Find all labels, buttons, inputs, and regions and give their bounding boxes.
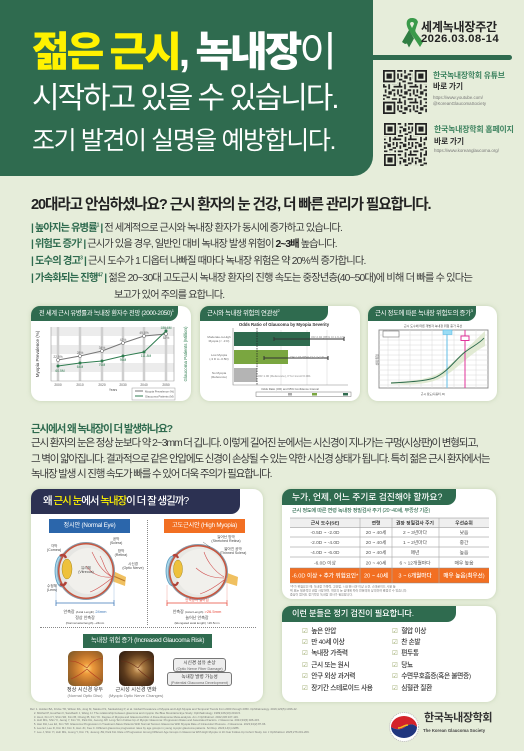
dotted horizontal divider xyxy=(40,627,256,628)
chart 1 heading xyxy=(31,306,178,321)
chart 2 heading xyxy=(200,306,328,321)
line chart: 2020 xyxy=(98,383,106,387)
panel: why myopic eyes xyxy=(31,489,263,702)
high myopia label xyxy=(164,519,245,533)
item: ☑ 편두통 xyxy=(392,650,419,657)
line chart: 22.9% xyxy=(53,355,63,359)
bar chart: OR 2.92 (95% CI 1.9-4.5) xyxy=(311,335,345,339)
icon: high myopia eye diagram: 늘어난 안축장 xyxy=(185,614,209,620)
week date: 2026.03.08-14 xyxy=(421,33,499,45)
panel: myopia severity chart xyxy=(368,306,497,401)
icon: normal eye diagram xyxy=(47,536,144,625)
line chart: Glaucoma Patients (Million) xyxy=(183,326,188,382)
screening table: 매우 높음(최우선) xyxy=(443,572,485,580)
callout: nerve damage xyxy=(173,658,226,672)
bullet: risk: | 위험도 증가2 | 근시가 있을 경우, 일반인 대비 녹내장 발생 위험이 2~3배 높습니다. xyxy=(31,238,337,250)
item: ☑ 당뇨 xyxy=(392,662,413,669)
panel heading: 왜 근시 눈에서 녹내장이 더 잘 생길까? xyxy=(43,495,188,507)
icon: high myopia eye diagram: 얇아진 공막 xyxy=(224,546,242,551)
bar chart: Myopia (< -3 D) xyxy=(209,339,229,343)
icon: high myopia eye diagram: 안축장이 길어짐 xyxy=(185,597,209,602)
line chart: 34% xyxy=(99,346,105,350)
bullet: dose: | 도수의 경고3 | 근시 도수가 1 디옵터 나빠질 때마다 녹내장 위험은 약 20%씩 증가합니다. xyxy=(31,255,366,266)
item: ☑ 만 40세 이상 xyxy=(302,639,344,646)
screening table: 낮음 xyxy=(460,529,469,536)
icon: normal eye diagram: (Lens) xyxy=(47,588,57,592)
high myopia label: 고도근시안 (High Myopia) xyxy=(172,522,237,529)
screening table: 권장 정밀검사 주기 xyxy=(396,520,434,526)
main heading: 20대라고 안심하셨나요? 근시 환자의 눈 건강, 더 빠른 관리가 필요합니다. xyxy=(31,197,430,213)
youtube url: @KoreanGlaucomaSociety xyxy=(433,101,486,106)
increased risk label: 녹내장 위험 증가 (Increased Glaucoma Risk) xyxy=(91,637,204,644)
explanation paragraph xyxy=(31,437,490,480)
society name english: The Korean Glaucoma Society xyxy=(423,728,485,733)
title line 2: 시작하고 있을 수 있습니다. xyxy=(32,82,337,115)
explanation heading: 근시에서 왜 녹내장이 더 발생하나요? xyxy=(31,423,172,435)
screening table: 증상이 없어도 정기적인 녹내장 검사가 필요합니다. xyxy=(290,592,353,596)
callout: nerve damage: (Optic Nerve Fiber Damage) xyxy=(176,666,223,670)
screening table xyxy=(290,518,489,596)
line chart: Years xyxy=(109,388,118,392)
references: 7. Lee J, Shin YI, Huh MG, Jeong Y, Kim YK, Jeoung JW, Park KH. Rate of Progression Among Different Age Groups in Glaucoma With High Myopia: A 10-Year Follow-Up Cohort Study. Am J Ophthalmol. 2025;276:201-209. xyxy=(34,730,309,734)
line 1: 근시 환자의 눈은 정상 눈보다 약 2~3mm 더 깁니다. 이렇게 길어진 눈에서는 시신경이 지나가는 구멍(시상판)이 변형되고, xyxy=(31,437,478,449)
caption normal: (Normal Optic Disc) xyxy=(68,693,102,698)
caption myopic xyxy=(108,686,164,698)
screening table: 20 ~ 40세 xyxy=(366,549,386,556)
fundus photo: myopic xyxy=(119,651,154,686)
checklist left xyxy=(302,627,373,692)
icon: normal eye diagram: (Retina) xyxy=(115,553,127,557)
screening table: -2.0D ~ -4.0D xyxy=(311,540,340,546)
line chart xyxy=(35,326,188,400)
youtube heading: 한국녹내장학회 유튜브 xyxy=(433,71,505,80)
icon: high myopia eye diagram: (Thinned Sclera) xyxy=(220,551,246,555)
caption myopic: (Myopic Optic Nerve Changes) xyxy=(109,693,163,698)
risk curve chart: 근시 정도(디옵터, D) xyxy=(421,392,445,396)
title line 1: 젊은 근시, 녹내장이 xyxy=(32,29,334,75)
line chart: 28% xyxy=(77,351,83,355)
item: ☑ 장기간 스테로이드 사용 xyxy=(302,685,373,692)
icon: high myopia eye diagram xyxy=(166,534,246,625)
line chart: 60.5M xyxy=(55,369,65,373)
icon: normal eye diagram: (Cornea) xyxy=(47,548,61,552)
panel heading: 누가, 언제, 어느 주기로 검진해야 할까요? xyxy=(292,492,442,502)
icon: high myopia eye diagram: (Stretched Retina) xyxy=(211,539,241,543)
bar chart: Odds Ratio of Glaucoma by Myopia Severity xyxy=(239,322,330,327)
bar chart: Low Myopia xyxy=(211,353,227,357)
chart 1 heading: 전 세계 근시 유병률과 녹내장 환자수 전망 (2000-2050)1 xyxy=(39,308,174,317)
icon: normal eye diagram: 안축장 (Axial Length) 24mm xyxy=(64,608,107,614)
bullet: progression: | 가속화되는 진행4-7 | 젊은 20~30대 고도근시 녹내장 환자의 진행 속도는 중장년층(40~50대)에 비해 더 빠를 수 있다는 xyxy=(31,272,472,284)
screening table: *추가 위험요인 예: 녹내장 가족력, 고안압, 시신경/시야 이상 소견, 스테로이드 사용 등 xyxy=(290,584,396,588)
screening table: 20 ~ 40세 xyxy=(366,539,386,546)
callout: glaucoma development: 녹내장 발병 가능성 xyxy=(181,674,218,679)
homepage heading: 한국녹내장학회 홈페이지 xyxy=(434,125,514,134)
icon: society logo xyxy=(389,712,419,742)
screening table: 연령 xyxy=(372,520,380,526)
panel: chart prevalence xyxy=(31,306,191,401)
line chart: 2050 xyxy=(162,383,170,387)
screening table: 근시 도수(SE) xyxy=(311,520,340,526)
dotted vertical divider xyxy=(147,520,148,625)
panel: odds ratio chart xyxy=(200,306,360,401)
screening table: -0.5D ~ -2.0D xyxy=(311,530,340,536)
item: ☑ 심혈관 질환 xyxy=(392,685,432,692)
fundus photo: normal xyxy=(68,651,103,686)
week title: 세계녹내장주간 xyxy=(421,20,497,34)
chart 3 heading xyxy=(368,306,476,321)
screening table: 높음 xyxy=(460,549,469,556)
caption normal: 정상 시신경 유두 xyxy=(67,687,103,693)
line chart: 2000 xyxy=(54,383,62,387)
item: ☑ 수면무호흡증(혹은 불면증) xyxy=(392,673,471,680)
item: ☑ 근시 또는 원시 xyxy=(302,662,349,669)
item: ☑ 안구 외상 과거력 xyxy=(302,673,355,680)
line chart: 95M xyxy=(120,358,126,362)
line 3: 녹내장 발생 시 진행 속도가 빠를 수 있어 더욱 주의가 필요합니다. xyxy=(31,468,271,480)
line chart: 49.8% xyxy=(139,331,149,335)
line chart: Myopia Prevalence (%) xyxy=(35,330,40,377)
increased risk label xyxy=(83,634,212,648)
risk curve chart: 상대 위험 xyxy=(375,354,379,366)
icon: normal eye diagram: (Vitreous) xyxy=(78,570,94,574)
chart 3 heading: 근시 정도에 따른 녹내장 위험도의 증가3 xyxy=(375,308,472,317)
references: 2. Mitchell P, Hourihan F, Sandbach J, Wang JJ. The relationship between glaucoma and myopia: the Blue Mountains Eye Study. Ophthalmology. 1999;106(10):2010-5. xyxy=(34,711,241,715)
bar chart: Odds Ratio (OR) and 95% Confidence Interval xyxy=(261,387,319,391)
screening table: 20 ~ 40세 xyxy=(366,529,386,536)
icon: high myopia eye diagram: 늘어난 망막 xyxy=(217,534,235,539)
society name korean: 한국녹내장학회 xyxy=(424,712,492,724)
references: Ref. 1. Holden BA, Fricke TR, Wilson DA, Jong M, Naidoo KS, Sankaridurg P, et al. Global Prevalence of Myopia and High Myopia and Temporal Trends from 2000 through 2050. Ophthalmology. 2016;123(5):1036-42. xyxy=(30,707,297,711)
caption myopic: 근시성 시신경 변화 xyxy=(115,687,157,693)
references: 3. Ha A, Kim CY, Shim SR, Kim IB, Chang IB, Kim YK. Degree of Myopia and Glaucoma Risk: A Dose-Response Meta-analysis. Am J Ophthalmol. 2022;236:107-119. xyxy=(34,715,239,719)
callout: nerve damage: 시신경 섬유 손상 xyxy=(183,660,216,665)
title line 3: 조기 발견이 실명을 예방합니다. xyxy=(32,127,335,155)
icon: normal eye diagram: (Optic Nerve) xyxy=(122,566,144,570)
chart 2 heading: 근시와 녹내장 위험의 연관성2 xyxy=(207,308,280,317)
risk curve chart: 근시 도수에 따른 개방각 녹내장 위험 증가 곡선 xyxy=(404,323,462,328)
bar chart: OR 1.00 (Reference), P for trend<0.001 xyxy=(258,374,311,378)
references: 4. Huh MG, Shin YI, Jeong Y, Kim YK, Park KH, Jeoung JW. Long-Term Follow-Up of Myopic Glaucoma: Progression Rates and Associated Factors. J Glaucoma. 2024;33(6):406-415. xyxy=(34,718,260,722)
panel heading xyxy=(282,606,456,622)
line chart: 2010 xyxy=(76,383,84,387)
normal eye label: 정시안 (Normal Eye) xyxy=(63,522,116,529)
icon: green ribbon xyxy=(402,18,423,48)
bullet list xyxy=(31,222,472,300)
risk curve chart xyxy=(375,323,488,396)
bullet: prevalence: | 높아지는 유병률1 | 전 세계적으로 근시와 녹내장 환자가 동시에 증가하고 있습니다. xyxy=(31,222,342,234)
screening table: 6 ~ 12개월마다 xyxy=(399,560,431,566)
bar chart: Moderate-to-High xyxy=(207,335,231,339)
screening table: -4.0D ~ -6.0D xyxy=(311,550,340,556)
icon: high myopia eye diagram: 안축장 (Axial Length) >26.5mm xyxy=(173,608,222,614)
screening table: 20 ~ 40세 xyxy=(366,560,386,566)
icon: normal eye diagram: (Sclera) xyxy=(110,541,122,545)
references: 5. Han DH, Lee EJ, Kim TW. Glaucoma Progression in Treatment-Naive Patients With Normal Tension Glaucoma With Myopia Rate of Intraocular Pressure. J Glaucoma. 2023;34(2):87-96. xyxy=(34,722,266,726)
bar chart: OR 1.77 (95% CI 1.2-2.7) xyxy=(290,355,324,359)
line 2: 그 벽이 얇아집니다. 결과적으로 같은 안압에도 신경이 손상될 수 있는 약한 시신경 상태가 됩니다. 특히 젊은 근시 환자에서는 xyxy=(31,453,489,465)
divider line between week badge and QR area xyxy=(373,55,512,60)
references: 6. Lee EJ, Lee D, Kim MJ, Kim K, Han JC, Kee C. Different glaucoma progression rates by age groups in young myopic glaucoma patients. Sci Rep. 2024;14(1):2286. xyxy=(34,726,239,730)
icon: normal eye diagram: 각막 xyxy=(51,543,58,548)
line chart: Glaucoma Patients (M) xyxy=(145,394,174,398)
screening table: -6.0D 이상 + 추가 위험요인* xyxy=(292,572,359,580)
line chart: 2040 xyxy=(140,383,148,387)
screening table: 20 ~ 40세 xyxy=(364,572,388,580)
item: ☑ 찬 손발 xyxy=(392,639,420,646)
line chart: 111.8M xyxy=(141,354,152,358)
bar chart: (Reference) xyxy=(211,375,227,379)
homepage go: 바로 가기 xyxy=(434,137,464,146)
screening table: 2 ~ 3년마다 xyxy=(403,529,428,536)
icon: normal eye diagram: 유리체 xyxy=(81,565,91,570)
screening table: 3 ~ 6개월마다 xyxy=(398,572,432,580)
icon: normal eye diagram: 정상 안축장 xyxy=(75,614,95,620)
line chart: 52% xyxy=(163,336,169,340)
bullet continuation: 보고가 있어 주의를 요합니다. xyxy=(114,290,224,300)
screening table: 매년 xyxy=(411,549,419,556)
callout: glaucoma development: (Potential Glaucoma Development) xyxy=(171,680,228,684)
bar chart xyxy=(207,322,352,397)
homepage label xyxy=(434,125,514,153)
line chart: Myopia Prevalence (%) xyxy=(145,390,174,394)
item: ☑ 높은 안압 xyxy=(302,628,336,635)
panel: regular checkups xyxy=(282,606,496,702)
youtube label xyxy=(433,71,505,106)
screening table: 중간 xyxy=(460,539,469,546)
line chart: 2030 xyxy=(119,383,127,387)
icon: normal eye diagram: 망막 xyxy=(118,548,125,553)
panel heading xyxy=(282,489,456,505)
checklist right xyxy=(392,627,471,692)
screening table: 1 ~ 2년마다 xyxy=(403,539,428,546)
caption normal xyxy=(67,686,103,698)
icon: high myopia eye diagram: (Elongated axial length) >26.5mm xyxy=(175,621,220,625)
icon: normal eye diagram: 시신경 xyxy=(128,561,138,566)
homepage url: https://www.koreanglaucoma.org/ xyxy=(434,148,499,153)
bar chart: (-3 D to -0.5D) xyxy=(209,357,229,361)
youtube url xyxy=(433,95,486,106)
QR code: youtube xyxy=(383,70,427,114)
youtube url: https://www.youtube.com/ xyxy=(433,95,483,100)
callout: glaucoma development xyxy=(167,672,232,686)
screening table: -6.0D 이상 xyxy=(314,560,337,566)
header banner xyxy=(0,0,373,176)
line chart: 42% xyxy=(120,338,126,342)
youtube go: 바로 가기 xyxy=(433,82,463,91)
normal eye label xyxy=(49,519,130,533)
panel: who when how often xyxy=(282,489,496,599)
icon: normal eye diagram: (Normal axial length) ~24mm xyxy=(66,621,105,625)
table caption: 근시 정도에 따른 연령 녹내장 정밀검사 주기 (20~40세, 무증상 기준) xyxy=(292,508,430,514)
bar chart: No Myopia xyxy=(212,371,226,375)
screening table: 위 표는 일반적인 권장 사항이며, 개인의 눈 상태에 따라 전문의와 상의하여 결정할 수 있습니다. xyxy=(290,588,408,592)
panel heading xyxy=(31,489,240,514)
item: ☑ 녹내장 가족력 xyxy=(302,650,348,657)
line chart: 64M xyxy=(77,365,83,369)
icon: normal eye diagram: 공막 xyxy=(113,536,120,541)
line chart: 186.6M xyxy=(160,326,172,330)
item: ☑ 혈압 이상 xyxy=(392,628,426,635)
icon: normal eye diagram: 수정체 xyxy=(47,583,57,588)
references xyxy=(30,707,310,734)
panel heading: 이런 분들은 정기 검진이 필요합니다. xyxy=(292,609,414,618)
screening table: 매우 높음 xyxy=(454,560,474,566)
line chart: 76M xyxy=(99,363,105,367)
QR code: homepage xyxy=(384,123,427,166)
screening table: 우선순위 xyxy=(455,520,473,526)
